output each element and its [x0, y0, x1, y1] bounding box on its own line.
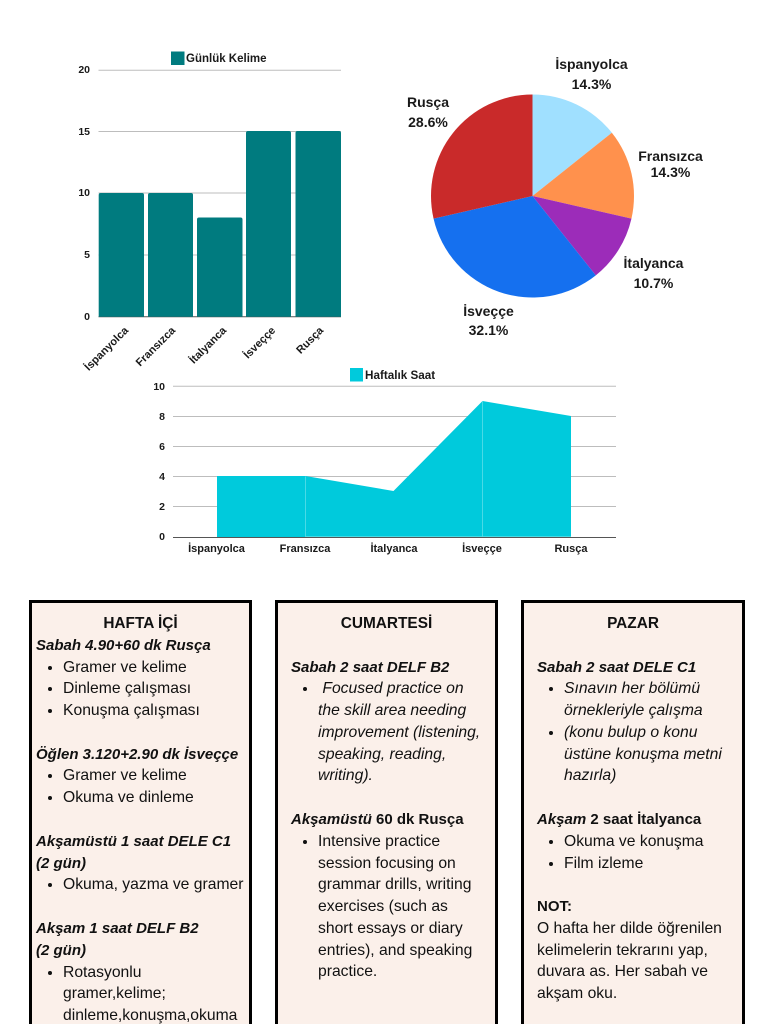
text block: Saturday schedule: Sabah 2 saat DELF B2: [291, 658, 449, 676]
heading: CUMARTESİ: CUMARTESİ: [341, 615, 432, 632]
text block: Sunday schedule: NOT:: [537, 898, 572, 915]
text block: Sunday schedule: Akşam 2 saat İtalyanca: [537, 811, 701, 828]
text block: weekday schedule: Okuma, yazma ve gramer: [63, 876, 243, 893]
text block: Saturday schedule: session focusing on: [318, 855, 456, 872]
x axis labels: İsveççe: [241, 324, 278, 361]
text block: weekday schedule: Sabah 4.90+60 dk Rusça: [36, 637, 211, 654]
text block: Saturday schedule: writing).: [318, 767, 373, 784]
text block: Sunday schedule: [536, 658, 722, 1002]
text block: weekday schedule: Gramer ve kelime: [63, 767, 187, 784]
y axis labels: 4: [159, 471, 165, 483]
text block: Sunday schedule: hazırla): [564, 767, 616, 784]
text block: Saturday schedule: Focused practice on: [322, 680, 464, 697]
y axis labels: [153, 381, 165, 543]
pie labels: İtalyanca: [624, 255, 684, 271]
text block: weekday schedule: Öğlen 3.120+2.90 dk İsveççe: [36, 746, 238, 763]
text block: weekday schedule: Gramer ve kelime: [63, 659, 187, 676]
panel: PAZAR: [521, 600, 745, 1024]
text block: Sunday schedule: Sınavın her bölümü: [564, 680, 700, 697]
pie labels: 10.7%: [634, 275, 674, 291]
text block: weekday schedule: Rotasyonlu: [63, 964, 141, 981]
pie chart: language share: [407, 56, 703, 338]
y axis labels: 15: [78, 126, 90, 138]
text block: Sunday schedule: akşam oku.: [537, 985, 617, 1002]
area chart: Haftalık Saat: [153, 368, 616, 555]
text block: Saturday schedule: Akşamüstü 60 dk Rusça: [291, 811, 464, 828]
text block: Saturday schedule: [290, 658, 480, 980]
pie labels: Rusça: [407, 94, 449, 110]
x axis labels: İsveççe: [462, 542, 502, 555]
text block: weekday schedule: gramer,kelime;: [63, 985, 166, 1002]
text block: weekday schedule: Okuma ve dinleme: [63, 789, 194, 806]
text block: Saturday schedule: improvement (listening,: [318, 724, 480, 741]
y axis labels: 8: [159, 411, 165, 423]
pie slices: [431, 94, 634, 298]
x axis labels: İspanyolca: [82, 323, 132, 373]
text block: Sunday schedule: üstüne konuşma metni: [564, 746, 722, 763]
pie labels: [407, 56, 703, 338]
text block: Sunday schedule: kelimelerin tekrarını yap,: [537, 942, 708, 959]
text block: Sunday schedule: Okuma ve konuşma: [564, 833, 704, 850]
y axis labels: 6: [159, 441, 165, 453]
x axis labels: Fransızca: [280, 543, 331, 555]
text block: Saturday schedule: short essays or diary: [318, 920, 463, 937]
text block: weekday schedule: Akşamüstü 1 saat DELE C1: [36, 833, 231, 850]
text block: Sunday schedule: (konu bulup o konu: [564, 724, 697, 741]
text block: Saturday schedule: entries), and speaking: [318, 942, 472, 959]
y axis labels: 10: [78, 187, 90, 199]
x axis labels: [188, 542, 588, 555]
panel: HAFTA İÇİ: [29, 600, 252, 1024]
text block: Sunday schedule: Sabah 2 saat DELE C1: [537, 658, 696, 676]
x axis labels: İspanyolca: [188, 542, 246, 555]
text block: Saturday schedule: exercises (such as: [318, 898, 448, 915]
text block: Saturday schedule: Intensive practice: [318, 833, 440, 850]
text block: Sunday schedule: duvara as. Her sabah ve: [537, 963, 708, 980]
y axis labels: 5: [84, 249, 90, 261]
pie labels: 32.1%: [469, 322, 509, 338]
panel: CUMARTESİ: [275, 600, 498, 1024]
x axis labels: [82, 323, 327, 373]
y axis labels: 0: [159, 531, 165, 543]
pie labels: İspanyolca: [555, 56, 628, 72]
y axis labels: [78, 64, 90, 323]
x axis labels: Rusça: [294, 324, 327, 356]
text block: weekday schedule: (2 gün): [36, 942, 86, 959]
bars: [99, 131, 341, 317]
text block: Sunday schedule: örnekleriyle çalışma: [564, 702, 703, 719]
text block: Sunday schedule: Film izleme: [564, 855, 643, 872]
pie labels: 14.3%: [572, 76, 612, 92]
text block: Saturday schedule: the skill area needing: [318, 702, 466, 719]
pie labels: 28.6%: [408, 114, 448, 130]
heading: HAFTA İÇİ: HAFTA İÇİ: [103, 615, 178, 632]
text block: weekday schedule: Dinleme çalışması: [63, 680, 191, 697]
heading: PAZAR: PAZAR: [607, 615, 659, 632]
y axis labels: 20: [78, 64, 90, 76]
x axis labels: Rusça: [554, 543, 588, 555]
x axis labels: Fransızca: [134, 324, 179, 369]
x axis labels: İtalyanca: [187, 323, 230, 366]
text block: Saturday schedule: speaking, reading,: [318, 746, 446, 763]
y axis labels: 2: [159, 501, 165, 513]
text block: weekday schedule: Konuşma çalışması: [63, 702, 200, 719]
text block: Sunday schedule: O hafta her dilde öğrenilen: [537, 920, 722, 937]
pie labels: 14.3%: [651, 164, 691, 180]
pie labels: Fransızca: [638, 148, 703, 164]
text block: Saturday schedule: grammar drills, writing: [318, 876, 471, 893]
text block: weekday schedule: (2 gün): [36, 855, 86, 872]
area: [217, 401, 571, 537]
text block: Saturday schedule: practice.: [318, 963, 377, 980]
legend: Günlük Kelime: Günlük Kelime: [186, 53, 267, 65]
text block: weekday schedule: [36, 637, 244, 1024]
pie labels: İsveççe: [463, 303, 514, 319]
y axis labels: 0: [84, 311, 90, 323]
legend: Haftalık Saat: Haftalık Saat: [365, 369, 435, 382]
x axis labels: İtalyanca: [370, 542, 418, 555]
text block: weekday schedule: Akşam 1 saat DELF B2: [36, 920, 199, 937]
text block: weekday schedule: dinleme,konuşma,okuma: [63, 1007, 237, 1024]
y axis labels: 10: [153, 381, 165, 393]
